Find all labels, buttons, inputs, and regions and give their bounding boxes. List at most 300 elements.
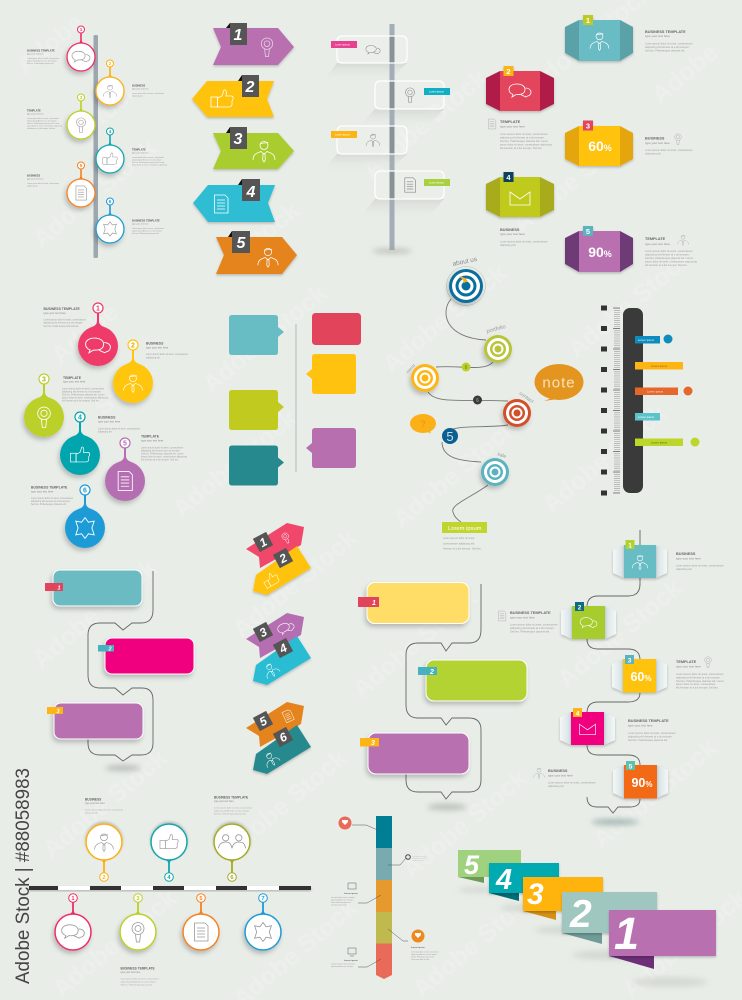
text: business with person icon: adipiscing elit. <box>548 784 565 788</box>
text business <box>85 798 123 814</box>
text: business template with doc icon: type your text here <box>510 616 535 620</box>
flag blue: Lorem ipsum <box>638 338 655 342</box>
text: business template: adipiscing elit.Aenean at a dui semper. <box>645 45 690 49</box>
target contact <box>503 399 531 427</box>
shadows <box>458 887 708 987</box>
text block 3: adipiscing elit.Aenean at a dui semper. <box>27 120 57 122</box>
text: template with person icon: adipiscing elit.Aenean at a dui semper. <box>645 252 690 256</box>
tag 2: 2 <box>107 646 112 652</box>
text block 6: Lorem ipsum dolor sit amet, consectetuer <box>31 497 73 500</box>
ring with text <box>406 855 427 862</box>
text: template with doc icon: adipiscing elit.Aenean at a dui semper. <box>500 136 545 140</box>
banner 5 <box>458 850 521 883</box>
box 5 purple 90%: 90% <box>588 244 612 260</box>
node 8: 8 <box>465 365 468 371</box>
floor shadow <box>591 819 639 825</box>
text block 4: adipiscing elit. <box>98 430 113 434</box>
text business: adipiscing elit. <box>85 812 98 814</box>
arrow 5 orange: 5 <box>237 235 247 252</box>
pair 5 and 6 <box>246 702 311 774</box>
text: business: adipiscing elit. <box>500 243 517 247</box>
watermark: Adobe Stock pattern: Adobe Stock <box>37 744 172 864</box>
flag yellow <box>635 362 683 370</box>
text block 5: ipsum dolor sit amet, consectetuer adipiscing <box>141 456 188 458</box>
sign 3 <box>331 126 407 154</box>
text: template with doc icon: Sed leo. Pellentesque placerat elit. Lorem <box>500 139 548 143</box>
text: template with doc icon: elit.Aenean at a dui semper. Sed leo. <box>500 146 543 150</box>
text: business template: type your text here <box>628 724 653 728</box>
banner 2 <box>562 892 657 944</box>
step 3: 60% <box>630 670 652 684</box>
text block 1: adipiscing elit.Aenean at a dui semper. <box>27 60 57 62</box>
sign 4 <box>375 171 450 199</box>
note bubble <box>534 364 584 401</box>
text: business with person icon <box>534 768 596 788</box>
watermark: Adobe Stock pattern: Adobe Stock <box>197 279 332 399</box>
text block 5: Lorem ipsum dolor sit amet, consectetuer <box>141 446 183 450</box>
watermark: Adobe Stock pattern: Adobe <box>646 38 724 110</box>
red download badge <box>338 816 352 830</box>
text: business template: BUSINESS TEMPLATE <box>628 719 669 723</box>
tag 2: 2 <box>429 669 434 676</box>
ring with text: consectetuer adipiscing elit. <box>412 857 427 860</box>
box red <box>312 313 361 345</box>
text: business with person icon: type your text here <box>548 774 573 778</box>
text block 6 <box>31 486 73 506</box>
text: business template with doc icon: BUSINESS TEMPLATE <box>510 611 551 615</box>
text: business with bulb icon <box>645 134 693 156</box>
text: template with person icon: elit.Aenean at a dui semper. Sed leo. <box>645 263 688 267</box>
sign 2: Lorem ipsum <box>429 90 444 94</box>
lorem ipsum tag <box>442 522 487 533</box>
drop 2 yellow <box>113 340 153 403</box>
watermark: Adobe Stock pattern: Stock <box>75 76 145 141</box>
banner 2: 2 <box>569 893 592 936</box>
text business template top: Sed leo. Pellentesque placerat elit. <box>214 812 246 816</box>
text block 1: Sed leo. Pellentesque placerat elit. <box>27 62 54 65</box>
node 5 <box>442 428 458 444</box>
box 4 lime <box>486 172 554 217</box>
pair 1 and 2: 2 <box>276 551 290 567</box>
sign 2 <box>375 81 450 109</box>
step 5: 5 <box>629 763 633 770</box>
sign 3: Lorem ipsum <box>335 132 350 136</box>
text block 3: type your text here <box>63 380 86 384</box>
text: template with bulb icon: adipiscing elit.Aenean at a dui semper. <box>676 676 721 680</box>
step 3 <box>612 655 667 692</box>
watermark: Adobe Stock pattern: Stock <box>90 356 160 421</box>
text: template with doc icon <box>488 119 552 150</box>
node 8 <box>462 362 470 372</box>
ruler bar <box>623 308 643 493</box>
watermark: Adobe Stock pattern: Adobe <box>46 298 124 370</box>
tag 2 <box>418 667 437 676</box>
text block 3: elit.Aenean at a dui semper. Sed leo. <box>62 400 100 402</box>
text block 3: type your text here <box>27 112 44 116</box>
text: business template <box>645 30 693 52</box>
text: business template: BUSINESS TEMPLATE <box>645 30 686 34</box>
text: template with bulb icon <box>676 657 724 690</box>
sign 1 <box>331 36 407 63</box>
box 3 yellow 60% <box>565 120 633 166</box>
box purple <box>54 703 143 739</box>
banner 5: 5 <box>464 850 480 880</box>
box 2 crimson <box>486 66 554 111</box>
pin 7 star: 7 <box>261 896 265 902</box>
pin 2 person: 2 <box>102 875 106 881</box>
watermark: Adobe Stock pattern: Adobe Stock <box>552 574 687 694</box>
pair 3 and 4 <box>246 613 311 685</box>
text block 2: adipiscing elit. <box>146 356 161 360</box>
monitor text block 1: Lorem ipsum dolor sit amet. <box>331 904 348 906</box>
text: template with doc icon: ipsum dolor sit amet, consectetuer adipiscing <box>500 142 552 146</box>
box 5 purple 90%: 5 <box>586 227 590 236</box>
text block 5: adipiscing elit.Aenean at a dui semper. <box>141 450 181 452</box>
tag 3 <box>47 707 63 715</box>
flag blue <box>635 334 672 344</box>
panel: numbered staircase banners <box>458 850 716 987</box>
watermark: Adobe Stock pattern: Adobe Stock <box>377 259 512 379</box>
text block 5 <box>141 434 188 462</box>
arrow 4 blue: 4 <box>246 184 256 201</box>
pole base shadow <box>372 248 412 254</box>
text: business template: Sed leo. Pellentesque placerat elit. <box>645 48 685 52</box>
pin 4 thumb <box>96 128 124 173</box>
text: business with person icon: Lorem ipsum dolor sit amet, consectetuer <box>548 780 596 784</box>
orange download badge with text <box>411 930 439 961</box>
text: template with bulb icon: elit.Aenean at a dui semper. Sed leo. <box>676 686 719 690</box>
text business template top <box>214 796 252 816</box>
box 3 yellow 60%: 60% <box>588 138 612 154</box>
text business template bottom: Sed leo. Pellentesque placerat elit. <box>120 984 153 986</box>
text block 6: type your text here <box>31 490 54 494</box>
text business template bottom: Lorem ipsum dolor sit amet, consectetuer <box>120 978 159 980</box>
text block 5: TEMPLATE <box>141 434 160 438</box>
text: business template with doc icon <box>498 611 558 634</box>
text: business template with doc icon: Lorem ipsum dolor sit amet, consectetuer <box>510 622 558 626</box>
text business: Lorem ipsum dolor sit amet, consectetuer <box>85 808 123 812</box>
pin 3 bulb <box>120 894 156 950</box>
text business template bottom: BUSINESS TEMPLATE <box>120 966 155 970</box>
pair 3 and 4: 4 <box>276 641 290 657</box>
text: template with bulb icon: ipsum dolor sit amet, consectetuer <box>676 682 716 686</box>
panel: speech boxes around centre line <box>229 313 361 486</box>
pin 5 document <box>67 162 95 207</box>
box yellow <box>367 582 469 624</box>
text block 3 <box>62 376 109 402</box>
arrow 1 purple <box>213 23 294 65</box>
arrow 2 yellow: 2 <box>245 79 255 96</box>
flag lime <box>635 438 700 446</box>
lorem ipsum tag: Lorem ipsum <box>448 526 482 532</box>
sign 4: Lorem ipsum <box>429 180 444 184</box>
panel: flow boxes centre <box>358 582 527 810</box>
text block 6: Sed leo. Pellentesque placerat elit. <box>132 232 159 235</box>
text block 4: Lorem ipsum dolor sit amet, consectetuer <box>132 156 165 159</box>
pin 3 bulb <box>67 94 95 139</box>
drop 6 blue <box>65 485 105 548</box>
question bubble: ? <box>420 419 426 429</box>
text block 3: ipsum dolor sit amet, consectetuer adipiscing <box>62 396 109 400</box>
text block 1 <box>27 48 60 65</box>
text block 3: TEMPLATE <box>63 376 82 380</box>
text block 5: Lorem ipsum dolor sit amet, consectetuer <box>27 182 60 185</box>
step olive <box>376 912 392 944</box>
text: template with person icon: Sed leo. Pellentesque placerat elit. Lorem <box>645 256 693 260</box>
watermark: Adobe Stock pattern: Adobe Stock <box>537 399 672 519</box>
panel: arrow banners 1-5 <box>192 23 297 274</box>
step 3: 3 <box>628 657 632 664</box>
pin 5 document: 5 <box>80 163 83 168</box>
text business template bottom <box>120 966 159 986</box>
step 5 <box>613 761 668 798</box>
text block 2 <box>132 84 165 98</box>
pin 6 pair <box>214 824 250 881</box>
panel: zigzag tagged arrows <box>246 523 311 774</box>
watermark: Adobe Stock pattern: Adobe Stock <box>562 244 697 364</box>
arrow 2 yellow <box>192 75 274 117</box>
text block 2: type your text here <box>146 346 169 350</box>
banner 4: 4 <box>495 864 512 896</box>
text: business with person icon: BUSINESS <box>548 769 568 773</box>
text: template with bulb icon: Sed leo. Pellentesque placerat elit. Lorem <box>676 679 724 683</box>
text: business: BUSINESS <box>500 228 520 232</box>
text block 4: TEMPLATE <box>132 148 146 152</box>
text block 1: Lorem ipsum dolor sit amet, consectetuer <box>27 57 60 60</box>
tag 3: 3 <box>371 740 375 747</box>
pair 3 and 4: 3 <box>257 625 270 640</box>
box teal <box>229 315 284 355</box>
box teal <box>53 570 142 606</box>
text: business template: adipiscing elit.Aenean at a dui semper. <box>628 734 673 738</box>
target about us <box>446 266 486 306</box>
orange download badge with text: Sed leo. Pellentesque placerat elit. <box>411 956 435 958</box>
text block 4: BUSINESS <box>98 416 116 420</box>
text block 4: adipiscing elit.Aenean at a dui semper. <box>132 158 162 162</box>
pin 4 thumb: 4 <box>167 875 171 881</box>
label portfolio: portfolio <box>486 324 506 335</box>
text block 6: adipiscing elit.Aenean at a dui semper. <box>132 230 162 232</box>
pin 5 document <box>183 894 219 950</box>
orange download badge with text: Lorem ipsum dolor sit amet. <box>411 958 430 961</box>
text: business: adipiscing elit. <box>676 567 693 571</box>
text block 4 <box>132 148 167 166</box>
text: business with bulb icon: Lorem ipsum dolor sit amet, consectetuer <box>645 148 693 152</box>
text block 2: BUSINESS <box>146 342 164 346</box>
text block 1: BUSINESS TEMPLATE <box>27 48 55 52</box>
note bubble: note <box>542 374 576 392</box>
minor ticks <box>614 308 620 493</box>
panel: vertical pin timeline <box>27 26 167 258</box>
box purple <box>306 428 356 468</box>
text block 4: Sed leo. Pellentesque placerat elit. Lorem <box>132 161 165 164</box>
monitor text block 1: Sed leo. Pellentesque placerat elit. <box>331 901 352 904</box>
floor shadow <box>105 765 141 771</box>
text business template top: BUSINESS TEMPLATE <box>214 796 248 800</box>
text business template bottom: type your text here <box>120 971 141 974</box>
watermark: Adobe Stock pattern: Adobe Stock <box>167 404 302 524</box>
tag 2 <box>98 645 114 652</box>
ring with text: Aenean at a dui semper. <box>412 859 426 862</box>
text: business template with doc icon: adipiscing elit.Aenean at a dui semper. <box>510 626 555 630</box>
pin 2 person <box>96 60 124 105</box>
drop 3 lime: 3 <box>42 376 46 383</box>
text business template top: Lorem ipsum dolor sit amet, consectetuer <box>214 806 252 810</box>
arrow 3 green: 3 <box>234 131 243 148</box>
text block 5: Sed leo. Pellentesque placerat elit. Lorem <box>141 452 184 456</box>
text: template with bulb icon: type your text here <box>676 664 701 668</box>
pin 6 pair: 6 <box>230 875 234 881</box>
watermark: Adobe Stock pattern: Adobe Stock <box>27 134 162 254</box>
text: template with bulb icon: Lorem ipsum dolor sit amet, consectetuer <box>676 672 724 676</box>
long shadows <box>322 63 444 220</box>
box 5 purple 90% <box>565 226 633 272</box>
tag 1: 1 <box>372 600 376 607</box>
text: business template: Lorem ipsum dolor sit amet, consectetuer <box>645 42 693 46</box>
text: template with doc icon: type your text here <box>500 124 525 128</box>
monitor text block 1: Lorem ipsum <box>344 893 358 895</box>
box 1 teal <box>565 15 633 61</box>
step 2: 2 <box>578 604 582 611</box>
timeline pole <box>94 35 98 258</box>
panel: target roadmap <box>405 256 584 550</box>
text: template with person icon: ipsum dolor sit amet, consectetuer adipiscing <box>645 260 697 264</box>
pin 6 star: 6 <box>109 199 112 204</box>
question bubble <box>410 414 436 434</box>
drop 4 teal: 4 <box>78 414 82 421</box>
text block 5: type your text here <box>141 438 164 442</box>
drop 6 blue: 6 <box>83 487 87 494</box>
watermark: Adobe Stock pattern: Adobe Stock <box>397 764 532 884</box>
panel: folded flow right <box>498 530 724 825</box>
label sale: sale <box>496 451 507 460</box>
text block 3: Sed leo. Pellentesque placerat elit. Lorem <box>27 122 60 125</box>
watermark: Adobe Stock pattern: Adobe Stock <box>227 524 362 644</box>
text block 2 <box>146 342 188 360</box>
text block 3: elit.Aenean at a dui semper. Sed leo. <box>27 127 56 130</box>
watermark: Adobe Stock pattern: Adobe Stock <box>387 414 522 534</box>
monitor text block 2 <box>331 948 358 968</box>
label about us: about us <box>452 256 479 268</box>
text block 3: ipsum dolor sit amet, consectetuer adipiscing <box>27 124 62 128</box>
connector lines <box>352 825 408 967</box>
major ticks <box>613 308 620 493</box>
arrow 4 blue <box>193 179 275 222</box>
text block 3 <box>27 108 62 130</box>
panel: flow boxes left <box>45 570 194 771</box>
arrow 5 orange <box>216 231 297 274</box>
tick markers <box>601 306 607 496</box>
floor shadow <box>427 804 467 810</box>
monitor text block 2: Lorem ipsum <box>344 960 358 962</box>
text block 6: Sed leo. Pellentesque placerat elit. <box>31 503 67 506</box>
text block 1: Sed leo. Pellentesque placerat elit. <box>44 325 79 328</box>
sign 1: Lorem ipsum <box>335 42 350 46</box>
step orange <box>376 880 392 912</box>
orange download badge with text: adipiscing elit.Aenean at a dui semper. <box>411 953 437 956</box>
ring with text: Lorem ipsum dolor sit amet, <box>412 855 427 858</box>
pin 1 chat: 1 <box>80 27 83 32</box>
text block 1: adipiscing elit.Aenean at a dui semper. <box>44 322 83 324</box>
text block 4: type your text here <box>98 420 121 424</box>
box 4 lime: 4 <box>506 173 511 182</box>
watermark: Adobe Stock pattern: Stock <box>235 196 305 261</box>
banner 1: 1 <box>614 908 639 959</box>
text block 5 <box>27 174 60 188</box>
text block 3: Lorem ipsum dolor sit amet, consectetuer <box>62 388 104 390</box>
text: business <box>676 552 724 571</box>
connector line <box>406 584 481 799</box>
box magenta <box>105 638 194 674</box>
box lime <box>426 660 527 701</box>
monitor text block 1: Lorem ipsum dolor sit amet, consectetuer <box>331 896 355 899</box>
connector line <box>88 571 153 761</box>
text: business: type your text here <box>676 556 701 560</box>
target portfolio <box>484 335 512 363</box>
tag 1: 1 <box>57 586 61 592</box>
target sale <box>481 458 509 486</box>
pin 4 thumb <box>151 824 187 881</box>
step 5: 90% <box>631 776 653 790</box>
drop 1 pink <box>78 303 118 366</box>
text: template with person icon: type your text here <box>645 242 670 246</box>
tag 3: 3 <box>56 709 60 715</box>
banner 3: 3 <box>527 878 544 911</box>
panel: signpost timeline <box>322 24 450 254</box>
text business template top: adipiscing elit.Aenean at a dui semper. <box>214 810 250 812</box>
drop 5 purple: 5 <box>123 440 127 447</box>
banner 1 <box>609 908 716 969</box>
pin 3 bulb: 3 <box>136 896 140 902</box>
node 5: 5 <box>446 429 454 444</box>
orange download badge with text: Lorem ipsum dolor sit amet, consectetuer <box>411 950 439 954</box>
arrow 3 green <box>213 127 294 169</box>
lorem ipsum text: consectetuer adipiscing elit. <box>443 542 475 546</box>
step 4: 4 <box>576 710 580 717</box>
text: business: Lorem ipsum dolor sit amet, consectetuer <box>500 240 548 244</box>
pin 7 star <box>245 894 281 950</box>
text: business: Lorem ipsum dolor sit amet, consectetuer <box>676 564 724 568</box>
text block 4: type your text here <box>132 152 149 154</box>
text: business template with doc icon: Sed leo. Pellentesque placerat elit. <box>510 630 550 634</box>
text block 6: type your text here <box>132 222 149 226</box>
box purple <box>368 733 469 774</box>
target menu <box>411 364 439 392</box>
orange download badge with text: Lorem ipsum <box>411 947 425 949</box>
pin 3 bulb: 3 <box>80 95 83 100</box>
pair 1 and 2 <box>246 523 311 595</box>
text business: BUSINESS <box>85 798 101 802</box>
text: business with bulb icon: type your text here <box>645 141 670 145</box>
arrow 1 purple: 1 <box>234 27 243 44</box>
flag lime: Lorem ipsum <box>651 440 668 444</box>
banner 4 <box>489 863 559 901</box>
text business: type your text here <box>85 802 105 805</box>
panel: vertical step bar <box>331 816 439 979</box>
text: template with person icon: Lorem ipsum dolor sit amet, consectetuer <box>645 249 693 253</box>
text block 1: Lorem ipsum dolor sit amet, consectetuer <box>44 318 86 322</box>
text block 6: BUSINESS TEMPLATE <box>31 486 68 490</box>
text block 3: Sed leo. Pellentesque placerat elit. Lorem <box>62 394 105 396</box>
text: business with bulb icon: BUSINESS <box>645 136 665 140</box>
text block 5: type your text here <box>27 178 44 180</box>
drop 4 teal <box>60 412 100 475</box>
label menu: menu <box>405 362 416 375</box>
signpost pole <box>390 24 394 250</box>
step 4 <box>560 708 615 745</box>
step salmon <box>376 944 392 979</box>
text block 6: BUSINESS TEMPLATE <box>132 218 160 222</box>
